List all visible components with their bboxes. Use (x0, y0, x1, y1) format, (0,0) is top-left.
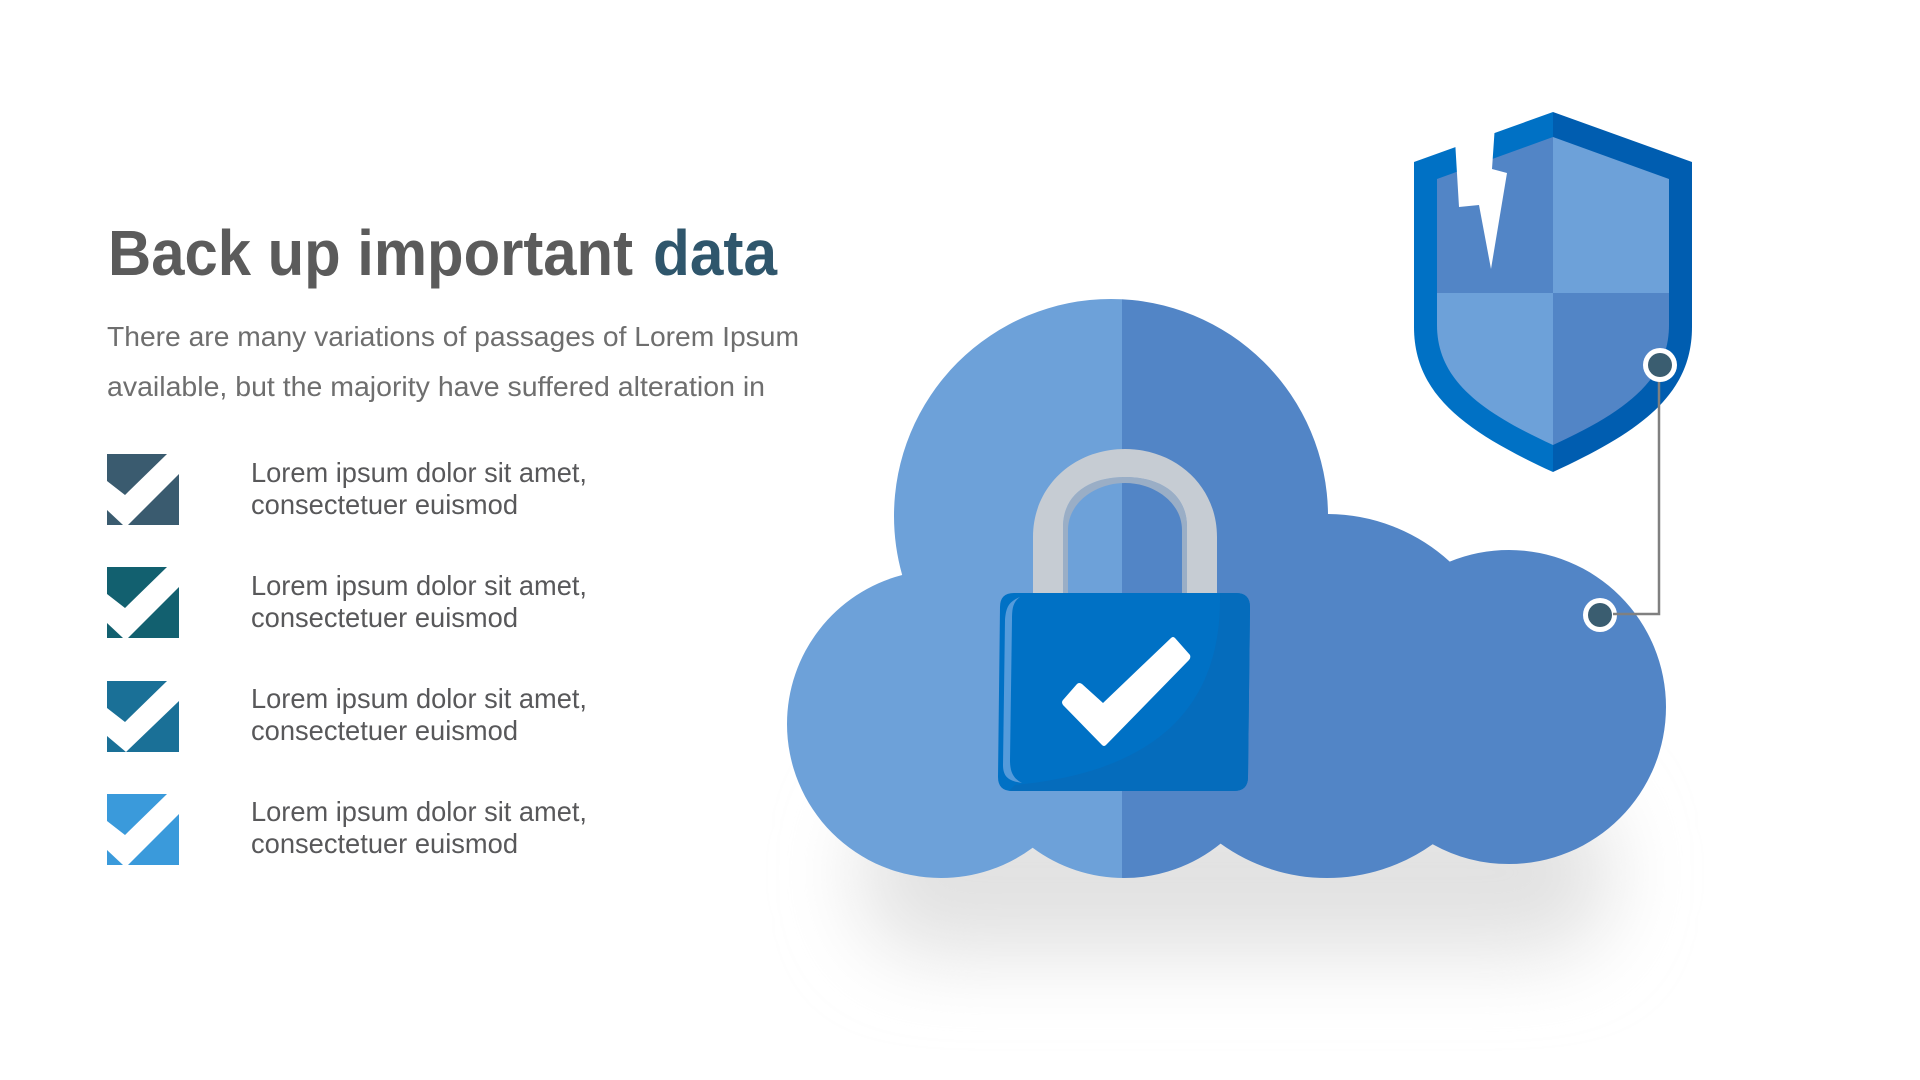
icon: check 2 (107, 567, 179, 638)
shield quarter bottom left (1437, 293, 1553, 445)
item 1 (107, 454, 587, 525)
text: item 1: consectetuer euismod (251, 489, 518, 520)
subtitle text (107, 321, 799, 402)
text: item 2 (251, 570, 587, 633)
marker on cloud (1583, 598, 1617, 632)
text: item 1 (251, 457, 587, 520)
text: item 4: consectetuer euismod (251, 828, 518, 859)
marker on shield (1643, 348, 1677, 382)
subtitle text: There are many variations of passages of Lorem Ipsum (107, 321, 799, 352)
text: item 3: consectetuer euismod (251, 715, 518, 746)
shield quarter top right (1553, 137, 1669, 293)
subtitle text: available, but the majority have suffered alteration in (107, 371, 765, 402)
text: item 2: consectetuer euismod (251, 602, 518, 633)
title: Back up important (108, 217, 633, 289)
shield (1414, 112, 1692, 472)
item 4 (107, 794, 587, 865)
checklist (107, 454, 587, 865)
text: item 3 (251, 683, 587, 746)
text: item 3: Lorem ipsum dolor sit amet, (251, 683, 587, 714)
lock body (998, 593, 1255, 795)
shield quarter bottom right (1553, 293, 1669, 445)
cloud (780, 290, 1682, 890)
shield outer right (1553, 112, 1692, 472)
cloud shadow (860, 790, 1610, 955)
shield crack (1455, 125, 1507, 269)
padlock (998, 449, 1255, 795)
shield outer left (1414, 112, 1553, 472)
shield quarter top left (1437, 137, 1553, 293)
text: item 4 (251, 796, 587, 859)
lock shackle (1033, 449, 1217, 594)
icon: check 3 (107, 681, 179, 752)
item 2 (107, 567, 587, 638)
text: item 4: Lorem ipsum dolor sit amet, (251, 796, 587, 827)
text: item 2: Lorem ipsum dolor sit amet, (251, 570, 587, 601)
item 3 (107, 681, 587, 752)
icon: check 4 (107, 794, 179, 865)
icon: check mark on lock (1062, 637, 1190, 746)
icon: check 1 (107, 454, 179, 525)
title: data (653, 217, 777, 289)
connector line (1613, 365, 1659, 614)
text: item 1: Lorem ipsum dolor sit amet, (251, 457, 587, 488)
